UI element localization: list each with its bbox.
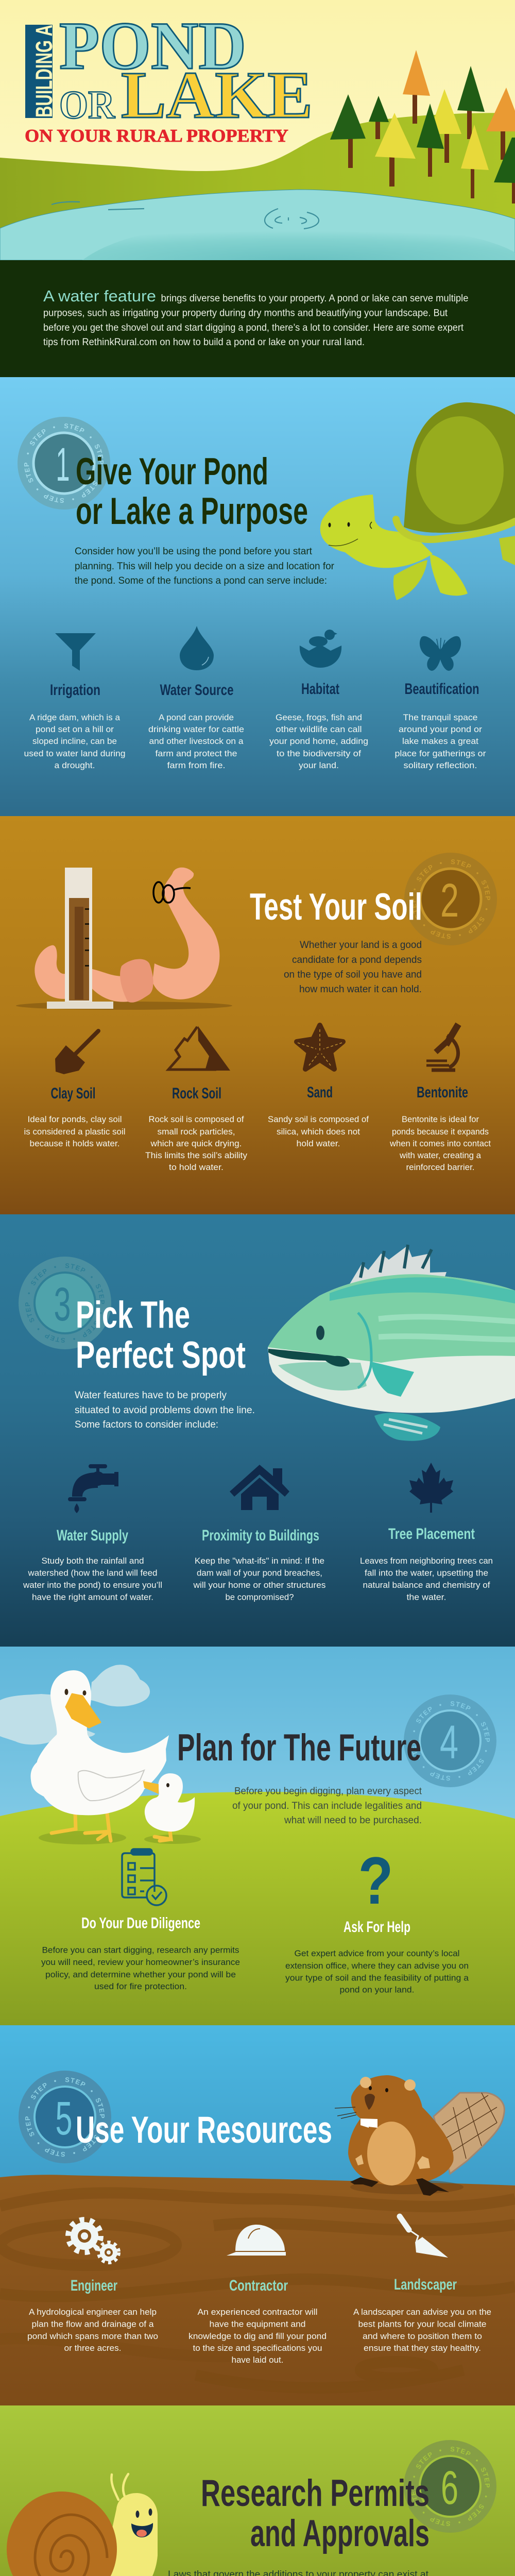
illustration: ducks <box>31 1670 201 1844</box>
description: is considered a plastic soil <box>24 1127 126 1137</box>
icon: trowel <box>400 2216 448 2258</box>
item: ask for help <box>285 1843 469 1995</box>
description: ensure that they stay healthy. <box>364 2343 481 2353</box>
clouds <box>0 1665 150 1744</box>
description: Get expert advice from your county’s local <box>295 1948 459 1958</box>
lake <box>0 190 515 260</box>
body text: on the type of soil you have and <box>284 970 422 980</box>
body text <box>232 1786 422 1826</box>
heading: Test Your Soil <box>250 886 422 928</box>
description: plan the flow and drainage of a <box>32 2319 154 2329</box>
panel: step 1 purpose <box>0 377 515 816</box>
description: Ideal for ponds, clay soil <box>28 1114 122 1124</box>
description: used for fire protection. <box>94 1981 187 1991</box>
hill <box>0 1792 515 2025</box>
ground bands <box>0 2193 515 2388</box>
body text: planning. This will help you decide on a size and location for <box>75 561 335 572</box>
step badge 2: STEP • STEP • STEP • STEP • STEP • STEP • <box>411 859 490 939</box>
description: a drought. <box>55 760 95 770</box>
illustration: snail <box>0 2474 158 2576</box>
description: reinforced barrier. <box>406 1162 475 1172</box>
icon: hard hat <box>227 2225 286 2256</box>
item: rock soil <box>145 1026 248 1172</box>
description: sloped incline, can be <box>32 736 117 746</box>
label: Sand <box>307 1084 333 1101</box>
body text: Water features have to be properly <box>75 1390 227 1401</box>
description <box>23 1556 162 1602</box>
item: beautification <box>394 636 486 770</box>
label: Bentonite <box>417 1084 468 1101</box>
step badge 6: STEP • STEP • STEP • STEP • STEP • STEP • <box>411 2447 490 2526</box>
item: water supply <box>23 1464 162 1602</box>
description: have laid out. <box>232 2355 283 2365</box>
item: bentonite <box>389 1024 491 1172</box>
description: A landscaper can advise you on the <box>353 2307 491 2317</box>
item: habitat <box>269 630 368 770</box>
label: Ask For Help <box>344 1919 410 1936</box>
ripple <box>52 202 319 229</box>
description: which are quick drying. <box>150 1139 242 1148</box>
label: Rock Soil <box>172 1085 221 1102</box>
description <box>268 1114 369 1148</box>
item: irrigation <box>24 633 125 770</box>
label: Tree Placement <box>388 1526 475 1543</box>
description <box>41 1945 240 1991</box>
description <box>285 1948 469 1995</box>
description: Study both the rainfall and <box>41 1556 144 1566</box>
illustration: beaver <box>335 2075 504 2196</box>
body text: Before you begin digging, plan every aspect <box>234 1786 422 1797</box>
description: other wildlife can call <box>276 724 362 734</box>
icon: house <box>230 1465 289 1510</box>
item: clay soil <box>24 1031 126 1148</box>
heading: Plan for The Future <box>177 1727 421 1769</box>
body text: candidate for a pond depends <box>292 955 422 965</box>
step badge 3: STEP • STEP • STEP • STEP • STEP • STEP • <box>25 1263 105 1343</box>
icon: shovel <box>55 1031 98 1074</box>
panel: step 6 permits <box>0 2405 515 2576</box>
description: and where to position them to <box>363 2331 482 2341</box>
description <box>360 1556 493 1602</box>
description: Keep the "what-ifs" in mind: If the <box>195 1556 324 1566</box>
description <box>148 713 244 770</box>
description: A pond can provide <box>159 713 234 722</box>
description <box>353 2307 491 2353</box>
step badge 3: 3 <box>54 1278 71 1331</box>
heading: Perfect Spot <box>76 1334 246 1376</box>
description <box>27 2307 158 2353</box>
description: solitary reflection. <box>404 760 477 770</box>
description: Sandy soil is composed of <box>268 1114 369 1124</box>
description: extension office, where they can advise you on <box>285 1961 469 1971</box>
item: due diligence <box>41 1849 240 1991</box>
description: Before you can start digging, research any permits <box>42 1945 239 1955</box>
description: knowledge to dig and fill your pond <box>188 2331 327 2341</box>
panel: step 5 resources <box>0 2025 515 2405</box>
intro text: before you get the shovel out and start digging a pond, there’s a lot to consider. Here are some expert <box>43 323 464 333</box>
description: Geese, frogs, fish and <box>276 713 362 722</box>
description: best plants for your local climate <box>358 2319 486 2329</box>
icon: mountain <box>168 1026 230 1071</box>
item: tree placement <box>360 1463 493 1602</box>
heading: Use Your Resources <box>76 2109 332 2151</box>
description: silica, which does not <box>277 1127 360 1137</box>
description: natural balance and chemistry of <box>363 1580 490 1590</box>
description: water into the pond) to ensure you’ll <box>23 1580 162 1590</box>
description: your type of soil and the feasibility of putting a <box>285 1973 469 1982</box>
description: farm from fire. <box>167 760 226 770</box>
intro text: purposes, such as irrigating your property during dry months and beautifying your landscape. But <box>43 308 448 318</box>
body text <box>284 940 422 995</box>
description: pond on your land. <box>340 1985 414 1995</box>
description: An experienced contractor will <box>198 2307 317 2317</box>
label: Clay Soil <box>50 1085 96 1102</box>
step badge 1: 1 <box>56 438 70 491</box>
description: farm and protect the <box>156 749 237 758</box>
step badge 6: 6 <box>441 2462 458 2514</box>
description: small rock particles, <box>158 1127 235 1137</box>
icon: drop <box>180 626 214 670</box>
body text: the pond. Some of the functions a pond can serve include: <box>75 575 327 586</box>
description: This limits the soil’s ability <box>145 1150 248 1160</box>
label: Landscaper <box>394 2276 457 2293</box>
description: the water. <box>407 1592 446 1602</box>
icon: question mark: ? <box>358 1843 393 1918</box>
panel: step 2 soil <box>0 816 515 1214</box>
description: and other livestock on a <box>149 736 244 746</box>
illustration: fish <box>268 1245 515 1441</box>
body text: Some factors to consider include: <box>75 1419 218 1430</box>
vertical label: building a <box>25 25 57 118</box>
description: around your pond or <box>399 724 482 734</box>
step badge 2: 2 <box>440 874 459 927</box>
body text: how much water it can hold. <box>299 984 422 995</box>
intro text: tips from RethinkRural.com on how to build a pond or lake on your rural land. <box>43 337 365 348</box>
description <box>188 2307 327 2365</box>
panel: step 3 spot <box>0 1214 515 1647</box>
description: The tranquil space <box>403 713 478 722</box>
body text: Consider how you’ll be using the pond before you start <box>75 546 313 557</box>
step badge 4: 4 <box>440 1716 458 1769</box>
description: have the equipment and <box>209 2319 306 2329</box>
description <box>24 713 125 770</box>
description: you will need, review your homeowner’s insurance <box>41 1957 240 1967</box>
panel: header illustration <box>0 0 515 260</box>
description: to the size and specifications you <box>193 2343 322 2353</box>
step badge 5: STEP • STEP • STEP • STEP • STEP • STEP • <box>25 2077 105 2157</box>
icon: funnel <box>55 633 96 671</box>
body text: what will need to be purchased. <box>284 1815 422 1826</box>
label: Do Your Due Diligence <box>81 1914 200 1932</box>
step badge 4: STEP • STEP • STEP • STEP • STEP • STEP • <box>411 1701 490 1781</box>
item: proximity to buildings <box>193 1465 325 1602</box>
icon: starfish <box>297 1025 343 1069</box>
panel: intro <box>0 260 515 377</box>
description: Bentonite is ideal for <box>402 1114 479 1124</box>
body text: Whether your land is a good <box>300 940 422 951</box>
icon: butterfly <box>420 636 461 671</box>
description: A hydrological engineer can help <box>29 2307 157 2317</box>
body text: situated to avoid problems down the line. <box>75 1405 255 1416</box>
hill <box>0 113 515 260</box>
ground <box>0 2175 515 2405</box>
description: ponds because it expands <box>392 1127 489 1137</box>
intro text: brings diverse benefits to your property. A pond or lake can serve multiple <box>161 293 469 304</box>
description: policy, and determine whether your pond will be <box>45 1970 236 1979</box>
description: place for gatherings or <box>394 749 486 758</box>
illustration: worm and test tube <box>16 868 232 1010</box>
description: hold water. <box>297 1139 340 1148</box>
heading: or Lake a Purpose <box>76 490 308 532</box>
trees <box>330 50 515 204</box>
item: water source <box>148 626 244 770</box>
word: pond: POND <box>59 8 246 83</box>
label: Habitat <box>301 681 339 698</box>
description <box>394 713 486 770</box>
description: fall into the water, upsetting the <box>365 1568 488 1578</box>
intro text <box>43 293 469 348</box>
body text: of your pond. This can include legalities and <box>232 1801 422 1811</box>
description: because it holds water. <box>30 1139 119 1148</box>
heading <box>201 2472 430 2554</box>
step badge 5: 5 <box>56 2092 72 2145</box>
label: Engineer <box>71 2277 117 2294</box>
title <box>25 8 313 146</box>
description: Leaves from neighboring trees can <box>360 1556 493 1566</box>
label: Irrigation <box>50 682 100 699</box>
description: watershed (how the land will feed <box>28 1568 157 1578</box>
label: Beautification <box>405 681 479 698</box>
step badge 1: STEP • STEP • STEP • STEP • STEP • STEP • <box>24 423 104 503</box>
description: dam wall of your pond breaches, <box>197 1568 322 1578</box>
intro lead: A water feature <box>43 287 156 305</box>
description: Rock soil is composed of <box>148 1114 244 1124</box>
label: Water Source <box>160 682 234 699</box>
item: contractor <box>188 2225 327 2365</box>
description <box>24 1114 126 1148</box>
item: sand <box>268 1025 369 1148</box>
icon: microscope <box>426 1024 458 1070</box>
subtitle: ON YOUR RURAL PROPERTY <box>25 126 288 146</box>
description: or three acres. <box>64 2343 122 2353</box>
icon: chick in egg <box>300 630 341 668</box>
icon: tap <box>68 1464 118 1513</box>
description: your land. <box>299 760 339 770</box>
heading <box>76 451 308 532</box>
icon: maple leaf <box>409 1463 453 1513</box>
description: your pond home, adding <box>269 736 368 746</box>
description: drinking water for cattle <box>148 724 244 734</box>
description: have the right amount of water. <box>32 1592 153 1602</box>
description: to hold water. <box>169 1162 224 1172</box>
icon: clipboard <box>122 1849 166 1905</box>
description <box>269 713 368 770</box>
description <box>389 1114 491 1172</box>
description: lake makes a great <box>402 736 478 746</box>
description: be compromised? <box>226 1592 294 1602</box>
description: to the biodiversity of <box>277 749 361 758</box>
item: engineer <box>27 2220 158 2353</box>
description: A ridge dam, which is a <box>29 713 121 722</box>
description: when it comes into contact <box>389 1139 491 1148</box>
heading <box>76 1294 246 1376</box>
description: will your home or other structures <box>193 1580 325 1590</box>
description: pond which spans more than two <box>27 2331 158 2341</box>
label: Contractor <box>229 2277 288 2294</box>
word: lake: LAKE <box>121 58 313 132</box>
body text <box>75 1390 255 1430</box>
heading: Research Permits <box>201 2472 430 2514</box>
description <box>145 1114 248 1172</box>
illustration: turtle <box>320 402 515 600</box>
label: Water Supply <box>57 1527 128 1544</box>
item: landscaper <box>353 2216 491 2353</box>
description: pond set on a hill or <box>36 724 114 734</box>
panel: step 4 plan <box>0 1647 515 2025</box>
description: used to water land during <box>24 749 125 758</box>
heading: and Approvals <box>250 2513 430 2554</box>
body text <box>75 546 335 586</box>
description: with water, creating a <box>399 1150 482 1160</box>
heading: Pick The <box>76 1294 190 1336</box>
heading: Give Your Pond <box>76 451 268 493</box>
label: Proximity to Buildings <box>202 1527 319 1544</box>
word: or: OR <box>59 82 115 127</box>
description <box>193 1556 325 1602</box>
icon: gears <box>68 2220 118 2262</box>
